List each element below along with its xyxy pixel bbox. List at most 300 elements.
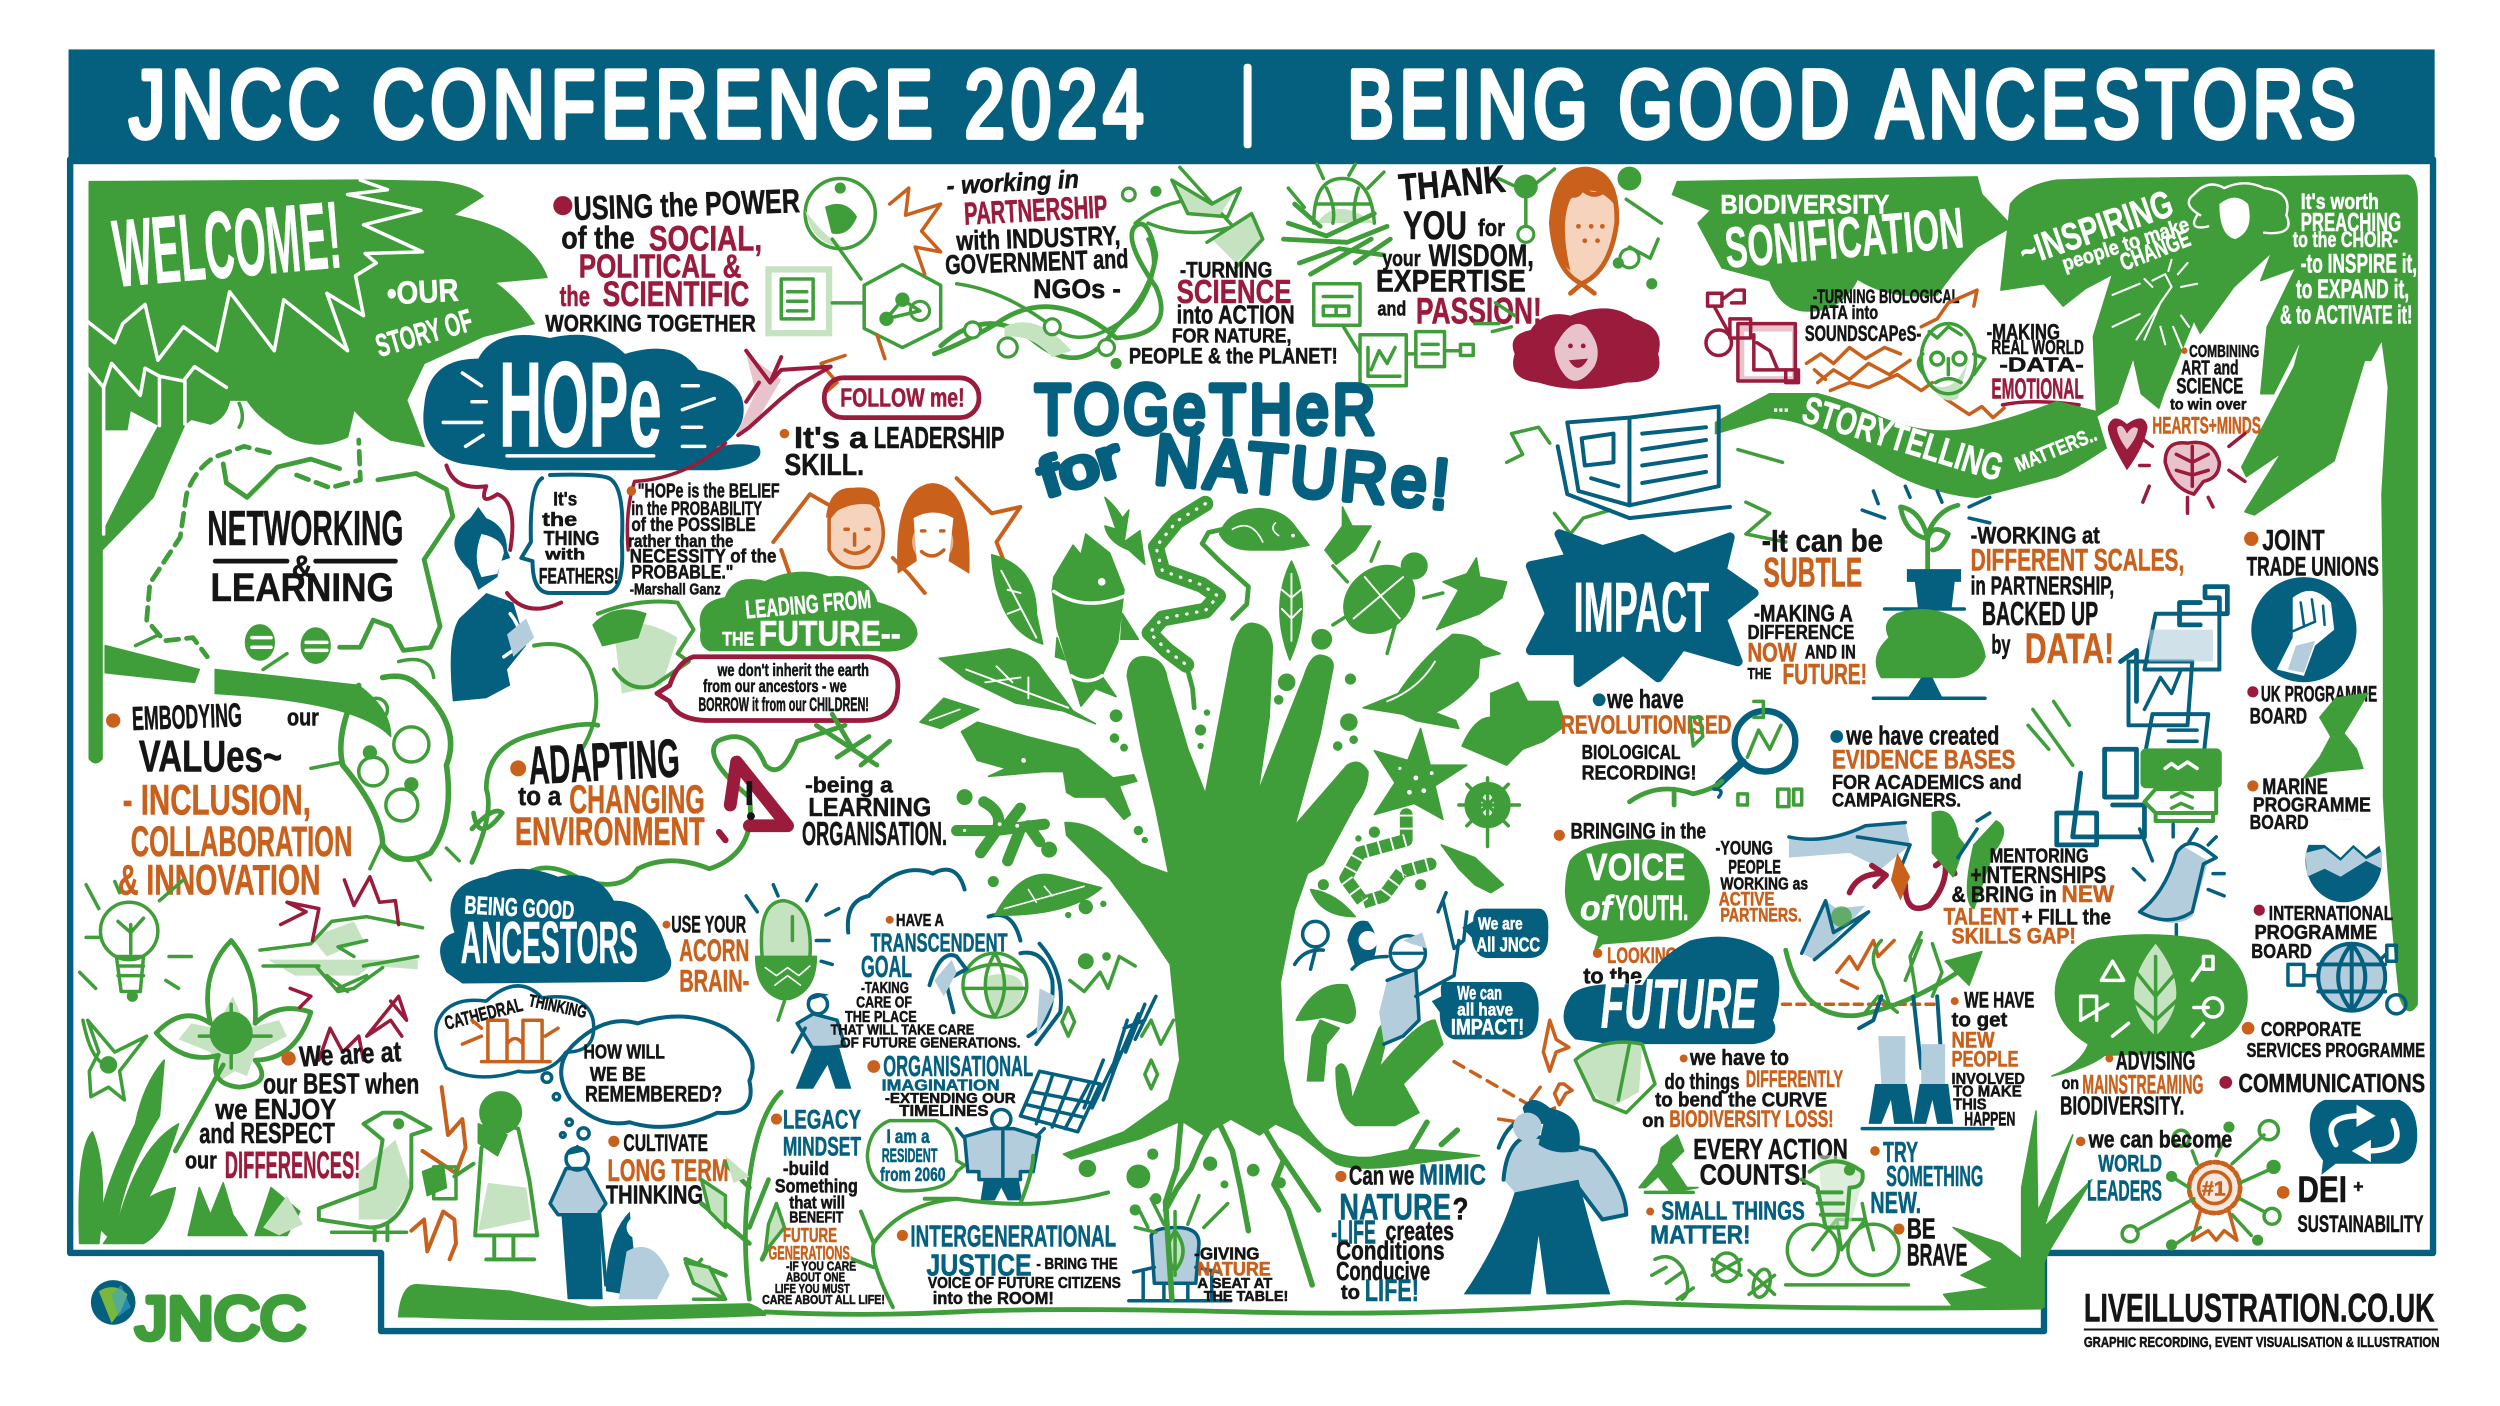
bubble: resident from 2060: from 2060 (880, 1165, 945, 1186)
bubble: resident from 2060 (867, 1121, 965, 1191)
bubble: resident from 2060: I am a (886, 1127, 930, 1148)
icon: seedling pot and tree (1862, 486, 1990, 698)
text: intergenerational justice: JUSTICE (926, 1249, 1032, 1282)
icon: acorn (746, 885, 839, 1020)
panel: welcome canopy: STORY OF (371, 302, 476, 364)
text: networking and learning: LEARNING (210, 566, 394, 610)
heading: together for nature: TOGeTHeR (1035, 371, 1379, 449)
panel: quote hope is the belief (627, 479, 780, 599)
text: evidence bases: we have created (1846, 722, 1999, 750)
text: giving nature a seat (1194, 1243, 1288, 1305)
panel: inspiring canopy right: to EXPAND it, (2296, 273, 2409, 304)
panel: thing with feathers bubble: the (542, 510, 577, 531)
panel: transcendent goal: GOAL (861, 951, 912, 984)
panel: cathedral thinking cloud: CATHEDRAL (443, 995, 525, 1035)
text: embodying our values (106, 697, 352, 904)
text: power of working together: SCIENTIFIC (603, 275, 749, 314)
icon: handshake and bursts (260, 877, 423, 1060)
text: power of working together: USING the POWER (573, 183, 801, 228)
text: intergenerational justice: VOICE OF FUTURE CITIZENS (928, 1275, 1121, 1292)
text: looking to the future cloud: FUTURE (1601, 965, 1758, 1043)
ground line (765, 1302, 2041, 1314)
panel: inspiring canopy right: It's worth (2301, 189, 2379, 214)
panel: transcendent goal: THAT WILL TAKE CARE (831, 1023, 974, 1039)
panel: storytelling ribbon: STORYTELLING (1797, 388, 2008, 490)
text: looking to the future cloud: to the (1583, 964, 1642, 989)
text: turning science into action: SCIENCE (1177, 274, 1291, 311)
text: adapting to a changing environment: ADAPTING (527, 728, 681, 796)
text: working at different scales: in PARTNERSHIP, (1971, 573, 2114, 601)
panel: quote hope is the belief: of the POSSIBLE (631, 515, 756, 536)
text: mentoring internships: +INTERNSHIPS (1971, 862, 2106, 889)
text: DEI and sustainability: SUSTAINABILITY (2298, 1211, 2423, 1238)
icon: calendar with chevrons (1020, 996, 1156, 1132)
text: turning science into action: PEOPLE & the PLANET! (1129, 343, 1338, 368)
panel: quote hope is the belief: in the PROBABILITY (631, 499, 762, 520)
icon: three people and speech bubbles: IMPACT! (1451, 1015, 1524, 1040)
text: we are at our best: DIFFERENCES! (225, 1144, 360, 1187)
panel: inspiring canopy right: -to INSPIRE it, (2301, 248, 2417, 279)
text: turning science into action: -TURNING (1180, 257, 1272, 282)
icon: small bugs (1652, 1253, 1775, 1299)
text: bend the curve: do things (1665, 1069, 1739, 1094)
text: legacy mindset: GENERATIONS. (768, 1243, 853, 1264)
text: working at different scales: DATA! (2025, 625, 2114, 673)
panel: biodiversity sonification banner: BIODIVERSITY (1720, 189, 1889, 220)
panel: thing with feathers bubble: FEATHERS! (539, 563, 619, 588)
icon: three people and speech bubbles: all have (1457, 999, 1513, 1019)
text: bend the curve: DIFFERENTLY (1746, 1066, 1843, 1093)
text: making real world data emotional (1987, 320, 2084, 406)
text: legacy mindset: -IF YOU CARE (786, 1259, 856, 1274)
text: legacy mindset: LEGACY (783, 1104, 861, 1135)
text: new people: HAPPEN (1964, 1109, 2015, 1130)
panel: being good ancestors cloud: BEING GOOD (464, 891, 575, 925)
panel: borrow from our children bubble: BORROW it from our CHILDREN! (698, 695, 869, 716)
text: it can be subtle: DIFFERENCE (1747, 621, 1854, 644)
text: revolutionised biological recording: BIOLOGICAL (1582, 741, 1681, 764)
panel: impact burst (1531, 534, 1754, 682)
panel: biodiversity sonification banner: SONIFICATION (1722, 196, 1966, 281)
text: thank you: EXPERTISE (1376, 263, 1526, 299)
text: every action counts (1639, 1134, 1848, 1192)
text: can we mimic nature: ? (1452, 1190, 1468, 1226)
icon: bird and person with mugs (188, 1087, 537, 1259)
panel: quote hope is the belief: PROBABLE." (631, 563, 733, 584)
frame outline (70, 159, 2433, 1331)
panel: boards list (2219, 525, 2425, 1098)
icons: globe, scroll and network (765, 179, 941, 392)
panel: boards list: TRADE UNIONS (2246, 550, 2379, 581)
panel: thing with feathers bubble (521, 475, 622, 593)
text: art and science hearts and minds: SCIENCE (2176, 374, 2243, 399)
panel: inspiring canopy right: & to ACTIVATE it! (2280, 302, 2412, 330)
icon: head profile (1575, 1042, 1655, 1113)
panel: quote hope is the belief: NECESSITY of the (630, 547, 776, 568)
text: try something new be brave: BRAVE (1907, 1237, 1967, 1273)
text: can we mimic nature: Can we (1349, 1159, 1414, 1190)
panel: how will we be remembered cloud: REMEMBERED? (585, 1082, 722, 1107)
icon: faces in vine loop (311, 676, 459, 880)
text: we are at our best: our BEST when (263, 1069, 419, 1101)
text: thank you: YOU (1403, 204, 1467, 248)
icon: light bulb (80, 880, 191, 1001)
text: new people: PEOPLE (1952, 1046, 2018, 1071)
text: evidence bases (1830, 722, 2022, 812)
text: revolutionised biological recording: RECORDING! (1582, 762, 1696, 785)
text: turning biological data into soundscapes: DATA into (1810, 303, 1878, 324)
icon: DNA helix and doves (934, 167, 1263, 368)
icon: recycle bubble (2310, 1100, 2417, 1175)
text: leadership skill: LEADERSHIP (874, 422, 1004, 455)
panel: borrow from our children bubble: from our ancestors - we (703, 676, 847, 696)
icon: mushroom and fern (1296, 985, 1443, 1125)
text: DEI and sustainability: DEI (2298, 1169, 2347, 1210)
panel: leading from the future: FUTURE-- (759, 615, 901, 654)
panel: being good ancestors cloud (440, 869, 671, 984)
panel: biodiversity sonification banner (1673, 177, 2012, 311)
text: revolutionised biological recording: we have (1606, 686, 1684, 714)
panel: storytelling ribbon (1716, 388, 2106, 497)
text: mentoring internships: TALENT (1944, 904, 2019, 931)
icon: three people and speech bubbles: We can (1457, 984, 1502, 1005)
icon: raised fist (2251, 577, 2357, 682)
panel: boards list: JOINT (2262, 525, 2325, 557)
text: it can be subtle: -It can be (1762, 523, 1883, 559)
panel: transcendent goal: TRANSCENDENT (871, 930, 1008, 958)
text: art and science hearts and minds: to win over (2170, 397, 2246, 414)
text: it can be subtle (1747, 523, 1883, 691)
panel: boards list: BOARD (2250, 811, 2309, 834)
icon: three people and speech bubbles: We are (1478, 913, 1523, 933)
text: can we mimic nature: creates (1386, 1215, 1454, 1246)
text: small things matter: MATTER! (1650, 1221, 1751, 1249)
panel: inspiring canopy right: people to make (2059, 213, 2192, 276)
text: intergenerational justice: - BRING THE (1036, 1256, 1118, 1273)
text: can we mimic nature (1331, 1159, 1486, 1308)
text: advising mainstreaming (2060, 1048, 2203, 1120)
text: young people active partners: ACTIVE (1719, 889, 1775, 910)
icon: three people and speech bubbles: All JNCC (1476, 934, 1540, 957)
text: revolutionised biological recording (1561, 686, 1732, 785)
icon: charts crimson (1706, 290, 1798, 383)
icon: old man and kneeling woman (550, 1145, 725, 1299)
text: giving nature a seat: A SEAT AT (1197, 1276, 1273, 1292)
icon: three people and speech bubbles (1295, 893, 1548, 1044)
text: making real world data emotional: -DATA- (1999, 353, 2084, 376)
text: world leaders: WORLD (2098, 1151, 2162, 1178)
text: DEI and sustainability: + (2353, 1176, 2364, 1196)
text: world leaders: LEADERS (2087, 1175, 2162, 1207)
text: can we mimic nature: MIMIC (1419, 1159, 1486, 1191)
text: young people active partners: WORKING as (1720, 874, 1808, 894)
text: turning science into action (1129, 257, 1338, 368)
text: legacy mindset (762, 1104, 885, 1307)
text: being a learning organisation (802, 772, 947, 853)
text: young people active partners (1716, 838, 1808, 926)
panel: boards list: INTERNATIONAL (2269, 902, 2393, 925)
illustration: animals and leaves around tree (920, 497, 1566, 1215)
text: legacy mindset: MINDSET (783, 1131, 861, 1162)
text: voice of youth: of (1580, 889, 1615, 928)
text: power of working together: POLITICAL & (579, 248, 741, 285)
text: adapting to a changing environment: to a (518, 783, 562, 811)
panel: boards list: BOARD (2251, 940, 2312, 963)
text: young people active partners: PEOPLE (1728, 858, 1781, 879)
text: we are at our best: we ENJOY (214, 1094, 336, 1126)
text: new people: WE HAVE (1964, 987, 2034, 1012)
text: organisational imagination: IMAGINATION (882, 1077, 1000, 1094)
panel: transcendent goal: -TAKING (861, 980, 909, 997)
panel: borrow from our children bubble (657, 657, 898, 721)
text: evidence bases: FOR ACADEMICS and (1832, 771, 2022, 794)
text: intergenerational justice: into the ROOM! (933, 1288, 1054, 1308)
text: networking and learning: & (292, 548, 312, 584)
text: DEI and sustainability (2277, 1169, 2423, 1238)
text: turning science into action: into ACTION (1177, 302, 1295, 330)
panel: quote hope is the belief: rather than the (628, 531, 734, 551)
panel: thing with feathers bubble: It's (553, 489, 577, 510)
bubble: resident from 2060: RESIDENT (882, 1146, 938, 1167)
panel: transcendent goal: OF FUTURE GENERATIONS. (840, 1035, 1020, 1051)
panel: cathedral thinking cloud: THINKING (527, 990, 589, 1022)
panel: leading from the future: THE (722, 630, 754, 651)
icon: data tiles (2028, 587, 2227, 845)
text: young people active partners: PARTNERS. (1720, 905, 1802, 926)
panel: welcome canopy: WELCOME! (109, 181, 345, 308)
text: young people active partners: -YOUNG (1716, 838, 1773, 859)
icon: hands holding globe (930, 944, 1061, 1044)
text: use your acorn brain (662, 912, 749, 999)
text: cultivate long term thinking: LONG TERM (607, 1152, 729, 1188)
text: organisational imagination (867, 1051, 1033, 1120)
text: world leaders (2076, 1127, 2232, 1207)
text: working at different scales (1971, 523, 2184, 673)
text: embodying our values: & INNOVATION (118, 856, 320, 904)
text: thank you: your (1382, 246, 1421, 271)
text: advising mainstreaming: MAINSTREAMING (2082, 1069, 2203, 1100)
credit: live illustration (2084, 1287, 2439, 1351)
panel: how will we be remembered cloud: HOW WILL (584, 1040, 665, 1063)
panel: how will we be remembered cloud: WE BE (590, 1063, 646, 1086)
text: voice of youth (1554, 819, 1709, 952)
panel: storytelling ribbon: ... (1773, 395, 1789, 416)
text: legacy mindset: that will (789, 1192, 845, 1212)
text: being a learning organisation: -being a (805, 772, 893, 797)
text: try something new be brave (1870, 1137, 1983, 1273)
text: giving nature a seat: -GIVING (1194, 1243, 1260, 1263)
panel: boards list: MARINE (2262, 774, 2328, 799)
text: embodying our values: COLLABORATION (131, 818, 352, 866)
title banner (69, 49, 2435, 164)
illustration: hand tree (1063, 623, 1480, 1299)
text: embodying our values: EMBODYING (131, 697, 243, 738)
text: evidence bases: EVIDENCE BASES (1832, 743, 2015, 774)
text: leadership skill: SKILL. (784, 449, 864, 482)
icon: chair with leaf (1129, 1196, 1231, 1301)
text: looking to the future cloud: LOOKING (1607, 943, 1677, 968)
panel: thing with feathers bubble: with (544, 547, 585, 564)
text: art and science hearts and minds: ART and (2181, 357, 2239, 380)
icon: teal bird (2129, 824, 2224, 945)
text: thank you: and (1378, 298, 1406, 321)
panel: boards list: PROGRAMME (2254, 921, 2377, 944)
text: it can be subtle: FUTURE! (1783, 659, 1867, 691)
icon: chat green (2141, 749, 2221, 821)
text: world leaders: we can become (2088, 1127, 2232, 1154)
icon: open book (1507, 406, 1786, 542)
text: power of working together: the (560, 281, 590, 313)
text: new people: TO MAKE (1953, 1084, 2022, 1101)
heading: together for nature: NATURe! (1151, 420, 1457, 524)
panel: transcendent goal (831, 870, 1020, 1051)
text: turning biological data into soundscapes: SOUNDSCAPeS- (1805, 321, 1921, 346)
text: legacy mindset: -build (783, 1159, 829, 1180)
icon: globe with squares (2288, 944, 2406, 1014)
text: advising mainstreaming: BIODIVERSITY. (2060, 1092, 2184, 1120)
icon: fish on bike (1786, 1155, 1908, 1285)
text: partnership: - working in (946, 166, 1080, 200)
icon: heart (2108, 418, 2148, 470)
text: advising mainstreaming: on (2062, 1073, 2079, 1093)
panel: follow me bubble and bird: FOLLOW me! (840, 384, 965, 412)
text: advising mainstreaming: ADVISING (2116, 1048, 2195, 1076)
panel: hope cloud: HOPe (499, 336, 662, 472)
text: thank you: for (1478, 215, 1505, 242)
text: turning science into action: FOR NATURE, (1172, 325, 1291, 348)
icon: data panels (1314, 284, 1515, 386)
text: legacy mindset: BENEFIT (789, 1210, 844, 1227)
icon: world leader medal: #1 (2202, 1178, 2226, 1201)
icon: flower and leaves (79, 941, 311, 1243)
text: legacy mindset: ABOUT ONE (786, 1270, 845, 1285)
text: organisational imagination: -EXTENDING OUR (885, 1091, 1016, 1107)
text: we are at our best (185, 1036, 419, 1187)
text: we are at our best: our (185, 1147, 217, 1174)
text: power of working together (545, 183, 801, 338)
text: making real world data emotional: -MAKING (1987, 320, 2060, 345)
panel: quote hope is the belief: "HOPe is the BELIEF (638, 479, 780, 502)
text: leadership skill (780, 422, 1004, 482)
panel: inspiring canopy right: CHANGE (2116, 225, 2194, 277)
text: can we mimic nature: Conducive (1336, 1258, 1430, 1286)
icon: hands butterfly arrows (1789, 811, 2003, 960)
text: art and science hearts and minds: HEARTS+MINDS (2152, 413, 2261, 440)
text: legacy mindset: LIFE YOU MUST (775, 1281, 850, 1296)
panel: advising bubble (2052, 935, 2247, 1076)
text: partnership: PARTNERSHIP (963, 188, 1108, 232)
text: adapting to a changing environment: CHANGING (569, 778, 705, 822)
text: being a learning organisation: LEARNING (808, 794, 931, 822)
icon: walking person (792, 993, 851, 1089)
panel: inspiring canopy right: to the CHOIR- (2293, 227, 2398, 252)
icon: growth curve with people and trees (1783, 933, 1993, 1129)
text: turning biological data into soundscapes: -TURNING BIOLOGICAL (1813, 287, 1960, 308)
text: evidence bases: CAMPAIGNERS. (1832, 791, 1961, 812)
text: cultivate long term thinking: CULTIVATE (623, 1130, 708, 1157)
text: bend the curve: to bend the CURVE (1655, 1088, 1827, 1111)
text: voice of youth: YOUTH. (1615, 889, 1688, 928)
text: organisational imagination: ORGANISATIONAL (883, 1051, 1033, 1083)
text: thank you (1376, 158, 1542, 332)
text: power of working together: of the (561, 220, 635, 256)
panel: boards list: PROGRAMME (2253, 793, 2371, 816)
panel: inspiring canopy right (2001, 175, 2417, 1011)
text: can we mimic nature: NATURE (1339, 1186, 1451, 1227)
text: new people: THIS (1953, 1096, 1987, 1113)
text: try something new be brave: BE (1907, 1214, 1936, 1246)
text: working at different scales: DIFFERENT SCALES, (1971, 542, 2184, 578)
text: power of working together: WORKING TOGETHER (545, 311, 756, 338)
text: thank you: PASSION! (1416, 291, 1542, 332)
text: mentoring internships: NEW (2062, 881, 2115, 908)
text: art and science hearts and minds: COMBINING (2189, 341, 2259, 361)
panel: boards list: CORPORATE (2261, 1018, 2361, 1041)
panel: transcendent goal: CARE OF (856, 994, 912, 1011)
text: embodying our values: our (287, 704, 319, 731)
text: mentoring internships (1944, 844, 2115, 949)
icon: warning triangle (719, 762, 788, 840)
text: new people (1951, 987, 2034, 1130)
text: it can be subtle: -MAKING A (1754, 601, 1853, 628)
text: voice of youth: BRINGING in the (1570, 819, 1706, 843)
text: cultivate long term thinking: THINKING (606, 1182, 703, 1210)
text: working at different scales: by (1991, 629, 2011, 660)
text: being a learning organisation: ORGANISATION. (802, 816, 947, 853)
text: legacy mindset: FUTURE (783, 1224, 837, 1247)
vines: networking border with dashes and bees (105, 440, 453, 736)
text: every action counts: COUNTS! (1700, 1159, 1808, 1191)
panel: inspiring canopy right: PREACHING (2301, 209, 2401, 237)
text: leadership skill: It's a (794, 422, 869, 455)
text: we are at our best: We are at (298, 1036, 402, 1073)
text: voice of youth: VOICE (1586, 846, 1685, 889)
text: art and science hearts and minds (2152, 341, 2261, 440)
vine: adapting border (472, 724, 845, 884)
panel: hope cloud (423, 335, 760, 472)
text: legacy mindset: Something (775, 1176, 858, 1197)
text: can we mimic nature: LIFE! (1365, 1272, 1419, 1308)
icon: thinking woman (1454, 1020, 1626, 1294)
text: partnership: with INDUSTRY, (955, 220, 1121, 256)
text: mentoring internships: + FILL the (2022, 905, 2111, 930)
text: turning biological data into soundscapes (1805, 287, 1960, 346)
text: intergenerational justice: INTERGENERATIONAL (910, 1221, 1116, 1254)
text: intergenerational justice (897, 1221, 1121, 1308)
panel: boards list: BOARD (2250, 704, 2307, 729)
text: making real world data emotional: EMOTIONAL (1991, 374, 2084, 406)
heading: together for nature (1032, 371, 1457, 524)
panel: welcome canopy (86, 180, 547, 763)
text: use your acorn brain: BRAIN- (679, 963, 749, 999)
text: can we mimic nature: -LIFE (1331, 1214, 1376, 1251)
text: it can be subtle: THE (1747, 666, 1771, 683)
icon: person with feather (446, 465, 561, 701)
text: partnership: NGOs - (1033, 273, 1121, 304)
icon: globe in nest (1283, 164, 1390, 274)
text: organisational imagination: TIMELINES (899, 1103, 989, 1120)
text: giving nature a seat: THE TABLE! (1204, 1289, 1288, 1305)
text: embodying our values: - INCLUSION, (123, 777, 311, 825)
icon: magnifier with vine (1629, 701, 1802, 807)
text: bend the curve (1642, 1045, 1843, 1133)
icon: worried face (1918, 324, 1985, 401)
vine: under resident (853, 1156, 1108, 1307)
text: new people: NEW (1952, 1027, 1995, 1052)
text: bend the curve: we have to (1689, 1045, 1789, 1070)
panel: welcome canopy: •OUR (386, 272, 459, 311)
text: adapting to a changing environment (510, 728, 705, 854)
